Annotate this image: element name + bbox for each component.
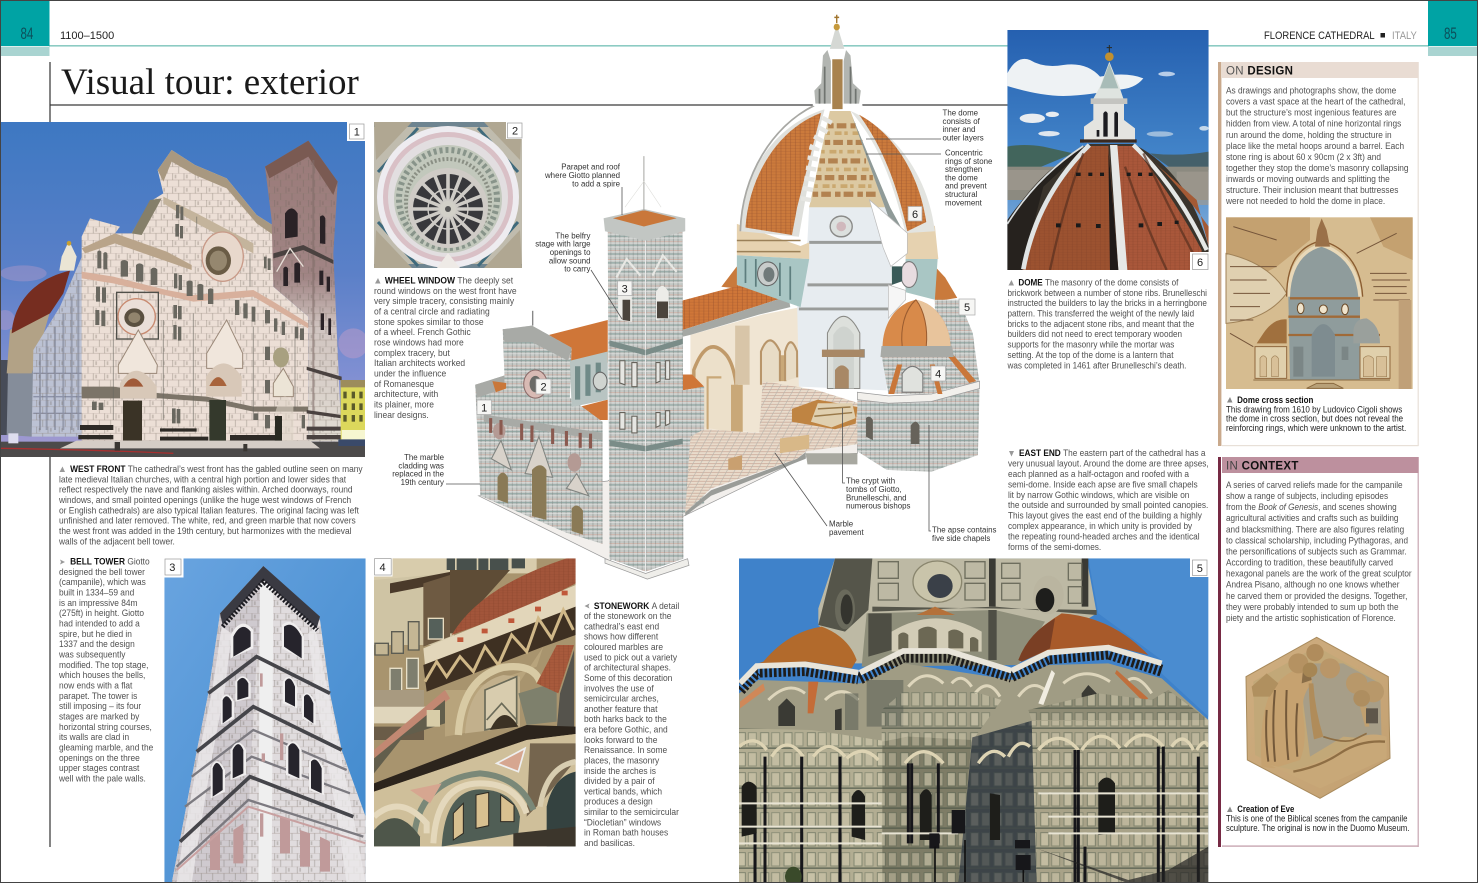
number 4 bbox=[374, 558, 392, 576]
caption: dome bbox=[1007, 277, 1207, 370]
text: on design: stone ring is about 60 x 90cm (2 x 3ft) and bbox=[1226, 151, 1381, 162]
caption: east end: each planned as a half-octagon and roofed with a bbox=[1008, 468, 1189, 479]
text: on design: structure. Their inclusion meant that buttresses bbox=[1226, 185, 1399, 195]
caption: dome cross section: This drawing from 1610 by Ludovico Cigoli shows bbox=[1226, 404, 1403, 414]
image: Cigoli dome cross section drawing bbox=[1226, 217, 1413, 389]
callout: crypt: numerous bishops bbox=[846, 502, 911, 511]
image: hexagonal relief, Creation of Eve bbox=[1246, 637, 1390, 798]
illustration number 5: 5 bbox=[964, 302, 970, 314]
text: on design: run around the dome, holding the structure in bbox=[1226, 129, 1392, 140]
caption: creation of eve: This is one of the Biblical scenes from the campanile bbox=[1226, 813, 1408, 824]
caption: bell tower: openings on the three bbox=[59, 752, 140, 763]
caption: wheel window: complex tracery, but bbox=[374, 347, 450, 358]
illustration number 4 bbox=[931, 366, 946, 381]
text: on design: place like the metal hoops around a barrel. Each bbox=[1226, 140, 1404, 151]
interior wall bbox=[690, 307, 801, 433]
rose windows bbox=[202, 232, 243, 281]
running head: period: 1100–1500 bbox=[60, 30, 114, 42]
caption: bell tower: built in 1334–59 and bbox=[59, 587, 134, 598]
caption: wheel window: stone spokes similar to those bbox=[374, 316, 484, 327]
caption: stonework: Renaissance. In some bbox=[584, 745, 667, 755]
text: in context: from the Book of Genesis, and scenes showing bbox=[1226, 502, 1397, 512]
caption: bell tower: horizontal string courses, bbox=[59, 721, 152, 732]
text: in context: agricultural activities and crafts such as building bbox=[1226, 513, 1399, 523]
caption: stonework: Some of this decoration bbox=[584, 673, 672, 683]
roofs bbox=[549, 320, 608, 363]
caption: bell tower: 1337 and the design bbox=[59, 639, 135, 649]
caption: stonework: cathedral’s east end bbox=[584, 621, 659, 632]
caption: dome: was completed in 1461 after Brunelleschi’s death. bbox=[1007, 360, 1186, 370]
text: in context: A series of carved reliefs made for the campanile bbox=[1226, 479, 1403, 490]
west facade bbox=[475, 326, 603, 544]
caption: dome cross section: Dome cross section bbox=[1237, 394, 1313, 405]
heading: in context bbox=[1222, 457, 1418, 473]
title: Visual tour: exterior bbox=[61, 62, 359, 103]
caption: dome: bricks to the adjacent stone ribs, and meant that the bbox=[1008, 318, 1194, 329]
callout: inner and outer layers bbox=[866, 109, 984, 142]
caption: west front: windows, and small pointed openings (unlike the huge west windows of French bbox=[58, 495, 351, 505]
dome: right drum bbox=[906, 226, 938, 259]
mid arches bbox=[768, 674, 1152, 700]
callout: crypt: Brunelleschi, and bbox=[846, 493, 907, 502]
caption: stonework: vertical bands, which bbox=[584, 786, 662, 796]
dome: left drum bbox=[737, 224, 809, 259]
callout: concentric rings: strengthen bbox=[945, 165, 982, 174]
caption: bell tower: BELL TOWER bbox=[70, 556, 127, 567]
caption: wheel window bbox=[374, 275, 517, 420]
number 6: 6 bbox=[1197, 257, 1203, 269]
caption: wheel window: round windows on the west front have bbox=[374, 285, 517, 296]
caption: stonework: looks forward to the bbox=[584, 734, 657, 745]
number 5 bbox=[1190, 558, 1208, 577]
text: in context: show a range of subjects, including episodes bbox=[1226, 491, 1389, 501]
caption: stonework: divided by a pair of bbox=[584, 776, 655, 786]
text: on design: hidden from view. A total of nine horizontal rings bbox=[1226, 118, 1402, 129]
panel: on design bbox=[1218, 62, 1419, 446]
text: on design bbox=[1225, 85, 1409, 206]
text: in context: to classical scholarship, including Pythagoras, and bbox=[1226, 535, 1408, 546]
text: in context: Andrea Pisano, although no one knows whether bbox=[1226, 579, 1399, 590]
callout: crypt: The crypt with bbox=[846, 477, 895, 486]
caption: west front: The cathedral’s west front has the gabled outline seen on many bbox=[128, 464, 363, 474]
callout: concentric rings: the dome bbox=[945, 173, 979, 182]
number 5: 5 bbox=[1197, 563, 1203, 575]
illustration number 6: 6 bbox=[912, 209, 918, 221]
page tab right: 85 bbox=[1428, 1, 1477, 56]
text: in context: and blacksmithing. There are also figures relating bbox=[1226, 524, 1404, 534]
callout: crypt: tombs of Giotto, bbox=[846, 485, 902, 494]
illustration number 5 bbox=[959, 299, 975, 315]
caption: stonework: A detail bbox=[652, 600, 679, 611]
callout: concentric rings: rings of stone bbox=[945, 157, 993, 166]
number 4: 4 bbox=[379, 562, 386, 574]
number 6 bbox=[1190, 252, 1209, 270]
caption: west front: the west front was added in the 19th century, but harmonizes with the medieval bbox=[59, 526, 351, 536]
caption: creation of eve: Creation of Eve bbox=[1237, 803, 1295, 814]
caption: bell tower: upper stages contrast bbox=[59, 763, 140, 773]
caption: dome: brickwork between a number of stone ribs. Brunelleschi bbox=[1008, 287, 1207, 298]
caption: bell tower: well with the pale walls. bbox=[58, 773, 146, 784]
teal header rule bbox=[49, 45, 1429, 47]
callout: marble cladding: The marble bbox=[404, 453, 445, 462]
lantern bbox=[813, 24, 863, 111]
caption: dome: pattern. This transferred the weight of the newly laid bbox=[1008, 308, 1194, 319]
callout: belfry stage: openings to bbox=[550, 248, 591, 257]
callout: apse chapels: The apse contains bbox=[932, 526, 997, 535]
caption: stonework: and basilicas. bbox=[584, 838, 635, 848]
caption: bell tower: still imposing – its four bbox=[59, 701, 141, 711]
caption: bell tower: modified. The top stage, bbox=[59, 659, 148, 670]
caption: stonework: another feature that bbox=[584, 703, 658, 714]
callout: concentric rings: and prevent bbox=[945, 182, 987, 191]
number 2 bbox=[506, 122, 523, 139]
text: in context: According to tradition, these beautifully carved bbox=[1226, 557, 1393, 568]
text: in context: they were probably intended to sum up both the bbox=[1226, 601, 1399, 612]
caption: bell tower: is an impressive 84m bbox=[59, 597, 137, 608]
caption: bell tower: spire, but he died in bbox=[59, 628, 132, 639]
caption: east end: complex appearance, in which unity is provided by bbox=[1008, 521, 1193, 531]
illustration number 4: 4 bbox=[935, 368, 941, 380]
text: on design: inwards or moving outwards and splitting the bbox=[1226, 174, 1390, 184]
callout: marble cladding bbox=[392, 453, 480, 487]
caption: dome: setting. At the top of the dome is a lantern that bbox=[1008, 349, 1174, 360]
caption: stonework: shows how different bbox=[584, 631, 659, 642]
callout: parapet and roof: to add a spire bbox=[572, 179, 621, 188]
front apse upper stage bbox=[881, 355, 976, 394]
callout: concentric rings bbox=[866, 148, 993, 207]
photo 5: east end bbox=[739, 558, 1208, 883]
caption: wheel window: architecture, with bbox=[374, 389, 438, 399]
page tab left: 84 bbox=[1, 1, 50, 56]
caption: stonework: of the stonework on the bbox=[584, 611, 671, 621]
callout: inner and outer layers: outer layers bbox=[942, 133, 984, 142]
callout: concentric rings: movement bbox=[945, 198, 983, 207]
caption: east end: This layout gives the east end of the building a highly bbox=[1008, 510, 1202, 521]
caption: bell tower: (275ft) in height. Giotto bbox=[59, 608, 144, 618]
caption: stonework: of architectural shapes. bbox=[584, 662, 671, 673]
caption: stonework: produces a design bbox=[584, 796, 653, 807]
wall between facade and tower bbox=[570, 352, 608, 407]
caption: east end: very unusual layout. Around the dome are three apses, bbox=[1008, 458, 1209, 469]
number 3 bbox=[164, 558, 184, 578]
caption: dome: supports for the masonry while the mortar was bbox=[1008, 339, 1175, 350]
caption: stonework: similar to the semicircular bbox=[584, 807, 679, 817]
caption: wheel window: of a wheel. French Gothic bbox=[374, 327, 471, 337]
caption: east end: forms of the semi-domes. bbox=[1008, 541, 1101, 552]
caption: bell tower: had intended to add a bbox=[59, 618, 140, 629]
text: in context: piety and the artistic sophistication of Florence. bbox=[1226, 612, 1396, 623]
caption: dome cross section: the dome in cross section, but does not reveal the bbox=[1226, 413, 1403, 424]
caption: east end: lit by narrow Gothic windows, which are visible on bbox=[1008, 489, 1189, 500]
running head: section: FLORENCE CATHEDRAL bbox=[1264, 30, 1375, 42]
cornices bbox=[740, 670, 858, 690]
caption: bell tower bbox=[58, 556, 153, 784]
callout: inner and outer layers: inner and bbox=[942, 125, 975, 134]
illustration number 3: 3 bbox=[622, 283, 628, 295]
illustration number 2: 2 bbox=[540, 382, 547, 394]
crossing interior bbox=[797, 205, 892, 390]
yellow building bbox=[341, 380, 366, 442]
callout: concentric rings: Concentric bbox=[945, 148, 983, 158]
callout: belfry stage: stage with large bbox=[535, 240, 591, 249]
photo 1: west front of cathedral bbox=[0, 122, 368, 458]
caption: bell tower: (campanile), which was bbox=[59, 577, 146, 587]
dome shell right bbox=[851, 111, 935, 233]
illustration number 2 bbox=[536, 379, 551, 394]
text: on design: As drawings and photographs show, the dome bbox=[1226, 85, 1396, 96]
caption: bell tower: Giotto bbox=[127, 556, 150, 567]
floor slab bbox=[479, 433, 857, 561]
caption: dome: The masonry of the dome consists of bbox=[1045, 277, 1179, 288]
caption: stonework: both harks back to the bbox=[584, 714, 667, 724]
caption: wheel window: WHEEL WINDOW bbox=[385, 275, 457, 286]
caption: stonework: involves the use of bbox=[584, 683, 654, 693]
number 1 bbox=[347, 122, 366, 141]
caption: west front: unfinished and later removed. The white, red, and green marble that now covers bbox=[59, 515, 356, 526]
caption: stonework bbox=[584, 600, 679, 848]
caption: dome: DOME bbox=[1018, 277, 1045, 288]
callout: inner and outer layers: consists of bbox=[942, 117, 981, 126]
caption: west front: reflect respectively the nave and flanking aisles within. Arched doorways, round bbox=[59, 484, 353, 495]
caption: bell tower: gleaming marble, and the bbox=[59, 742, 153, 753]
caption: east end: EAST END bbox=[1019, 448, 1063, 458]
heading: in context: IN CONTEXT bbox=[1226, 460, 1299, 472]
dome shell left bbox=[740, 109, 825, 237]
callout: belfry stage bbox=[535, 231, 622, 319]
callout: belfry stage: allow sound bbox=[549, 256, 590, 265]
caption: bell tower: designed the bell tower bbox=[59, 566, 145, 577]
bell tower bbox=[608, 231, 646, 572]
running head: section: ITALY bbox=[1392, 30, 1417, 42]
caption: bell tower: parapet. The tower is bbox=[59, 690, 138, 701]
callout: concentric rings: structural bbox=[945, 190, 978, 199]
illustration number 3 bbox=[618, 281, 632, 296]
caption: east end: the outside and surrounded by small pointed canopies. bbox=[1008, 500, 1208, 510]
caption: wheel window: The deeply set bbox=[457, 275, 514, 286]
caption: stonework: in Roman bath houses bbox=[584, 827, 669, 838]
caption: west front: WEST FRONT bbox=[70, 464, 128, 474]
photo 2: wheel window bbox=[374, 122, 522, 268]
caption: east end bbox=[1008, 448, 1209, 552]
caption: wheel window: of Romanesque bbox=[374, 378, 434, 389]
caption: bell tower: now ends with a flat bbox=[59, 680, 133, 691]
caption: wheel window: of a central circle and radiating bbox=[374, 306, 490, 317]
caption: west front: walls of the adjacent bell tower. bbox=[58, 536, 175, 546]
photo 3: bell tower bbox=[164, 558, 366, 883]
caption: stonework: STONEWORK bbox=[594, 600, 652, 611]
panel: in context bbox=[1218, 457, 1419, 847]
callout: belfry stage: to carry bbox=[564, 265, 591, 274]
callout: marble pavement bbox=[775, 453, 864, 537]
callout: apse chapels bbox=[929, 425, 997, 543]
callout: parapet and roof bbox=[544, 162, 622, 215]
caption: stonework: inside the arches is bbox=[584, 765, 657, 776]
front apse dome bbox=[883, 300, 950, 346]
callout: parapet and roof: where Giotto planned bbox=[544, 171, 620, 180]
callout: marble pavement: pavement bbox=[829, 528, 864, 537]
callout: crypt bbox=[843, 408, 911, 511]
caption: stonework: “Diocletian” windows bbox=[584, 817, 662, 827]
caption: stonework: places, the masonry bbox=[584, 755, 660, 766]
caption: west front: or English cathedrals) are also typical Italian features. The original facing was left bbox=[59, 505, 359, 515]
heading: on design: ON DESIGN bbox=[1226, 65, 1293, 77]
caption: stonework: coloured marbles are bbox=[584, 642, 663, 652]
aisle wall bbox=[682, 387, 704, 514]
caption: east end: The eastern part of the cathedral has a bbox=[1063, 448, 1206, 458]
number 3: 3 bbox=[169, 562, 175, 574]
cutaway illustration of the cathedral bbox=[475, 15, 980, 579]
illustration number 1: 1 bbox=[481, 402, 487, 414]
left margin rule bbox=[49, 62, 51, 847]
number 2: 2 bbox=[512, 126, 518, 138]
caption: wheel window: under the influence bbox=[374, 368, 446, 379]
caption: wheel window: very simple tracery, consisting mainly bbox=[374, 296, 515, 306]
marble floor bbox=[685, 381, 859, 512]
text: in context: he carved them or provided the designs. Together, bbox=[1226, 590, 1407, 601]
page tab right: 85: 85 bbox=[1444, 25, 1457, 44]
lower walls bbox=[739, 728, 882, 883]
caption: stonework: used to pick out a variety bbox=[584, 652, 678, 662]
text: on design: but the structure’s most ingenious features are bbox=[1226, 107, 1397, 118]
caption: dome: builders did not need to erect temporary wooden bbox=[1008, 329, 1182, 339]
caption: bell tower: which houses the bells, bbox=[58, 670, 145, 680]
page tab left: 84: 84 bbox=[20, 25, 33, 44]
rear chapels bbox=[721, 266, 957, 302]
text: on design: together they stop the dome’s masonry collapsing bbox=[1226, 163, 1409, 173]
ground bbox=[0, 442, 365, 458]
caption: west front bbox=[58, 464, 363, 546]
number 1: 1 bbox=[354, 126, 360, 138]
callout: marble pavement: Marble bbox=[829, 520, 854, 529]
gables and doors bbox=[118, 330, 157, 373]
callout: inner and outer layers: The dome bbox=[942, 109, 979, 118]
caption: dome cross section bbox=[1226, 394, 1406, 433]
heading: on design bbox=[1222, 62, 1418, 78]
text: in context: the personifications of subjects such as Grammar. bbox=[1226, 546, 1407, 557]
windows bbox=[92, 205, 305, 428]
crypt bbox=[792, 400, 857, 429]
caption: wheel window: Italian architects worked bbox=[374, 358, 465, 368]
callout: marble cladding: cladding was bbox=[398, 461, 444, 470]
tower bbox=[265, 141, 342, 442]
caption: bell tower: was subsequently bbox=[58, 649, 126, 660]
caption: creation of eve: sculpture. The original is now in the Duomo Museum. bbox=[1226, 822, 1409, 833]
caption: dome cross section: reinforcing rings, which were unknown to the artist. bbox=[1226, 422, 1406, 433]
illustration number 1 bbox=[477, 400, 492, 414]
text: on design: covers a vast space at the heart of the cathedral, bbox=[1226, 96, 1405, 107]
fresco bbox=[809, 111, 885, 207]
caption: bell tower: its walls are clad in bbox=[59, 732, 129, 742]
caption: wheel window: rose windows had more bbox=[374, 337, 464, 348]
text: in context: hexagonal panels are the work of the great sculptor bbox=[1226, 568, 1412, 579]
caption: east end: the repeating round-headed arches and the identical bbox=[1008, 531, 1200, 542]
callout: apse chapels: five side chapels bbox=[932, 534, 990, 543]
callout: belfry stage: The belfry bbox=[555, 231, 591, 240]
photo 4: stonework bbox=[374, 558, 576, 847]
caption: stonework: era before Gothic, and bbox=[584, 724, 668, 735]
caption: creation of eve bbox=[1226, 803, 1409, 833]
callout: marble cladding: replaced in the bbox=[392, 470, 445, 479]
front apse base bbox=[857, 385, 980, 472]
text: in context bbox=[1226, 479, 1412, 623]
caption: bell tower: stages are marked by bbox=[59, 711, 140, 722]
caption: stonework: semicircular arches, bbox=[584, 693, 659, 704]
illustration number 6 bbox=[908, 206, 922, 221]
caption: west front: late medieval Italian churches, with a central high portion and lower sides that bbox=[59, 474, 347, 484]
photo 6: dome bbox=[1007, 30, 1209, 270]
callout: parapet and roof: Parapet and roof bbox=[561, 162, 621, 172]
heading rule bbox=[50, 104, 1010, 106]
caption: wheel window: its plainer, more bbox=[374, 399, 434, 410]
caption: wheel window: linear designs. bbox=[374, 409, 429, 420]
caption: east end: semi-dome. Inside each apse are five small chapels bbox=[1008, 479, 1198, 489]
caption: dome: instructed the builders to lay the bricks in a herringbone bbox=[1008, 298, 1207, 308]
callout: marble cladding: 19th century bbox=[401, 478, 444, 487]
text: on design: were not needed to hold the dome in place. bbox=[1225, 196, 1385, 206]
